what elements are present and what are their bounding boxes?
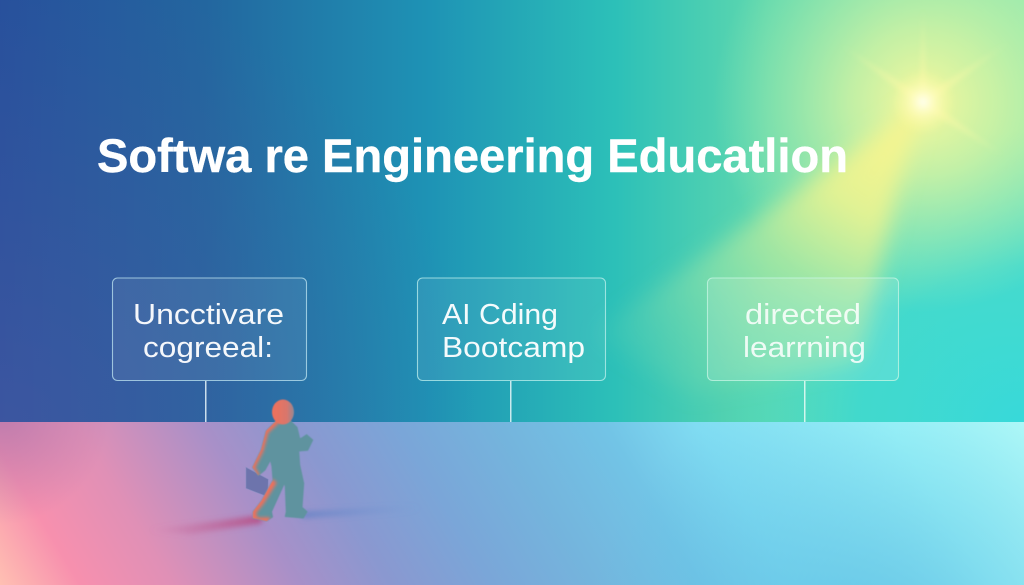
label text [133, 299, 284, 364]
person head [272, 400, 294, 424]
ground shadows [150, 506, 420, 534]
label text [743, 299, 866, 364]
icon: sun with rays [840, 8, 1012, 156]
label text: Uncctivare [133, 299, 284, 331]
label text: cogreeal: [143, 332, 273, 364]
label text: AI Cding [442, 299, 558, 331]
box outline [112, 278, 306, 380]
panel: unconventional path [112, 278, 306, 380]
label text [442, 299, 585, 364]
connector line 2 [510, 381, 512, 422]
person body [251, 418, 313, 522]
floor surface [0, 422, 1024, 585]
background: sky gradient wall [0, 0, 1024, 422]
box outline [418, 278, 606, 380]
box outline [708, 278, 898, 380]
panel: directed learning [708, 278, 898, 380]
connector line 3 [804, 381, 806, 422]
icon: briefcase [246, 467, 268, 497]
panel: AI coding bootcamp [418, 278, 606, 380]
label text: Bootcamp [442, 332, 585, 364]
connector line 1 [205, 381, 206, 422]
label text: directed [745, 299, 861, 331]
title: Softwa re Engineering Educatlion [97, 129, 848, 182]
label text: learrning [743, 332, 866, 364]
figure: walking person with briefcase [174, 398, 365, 534]
